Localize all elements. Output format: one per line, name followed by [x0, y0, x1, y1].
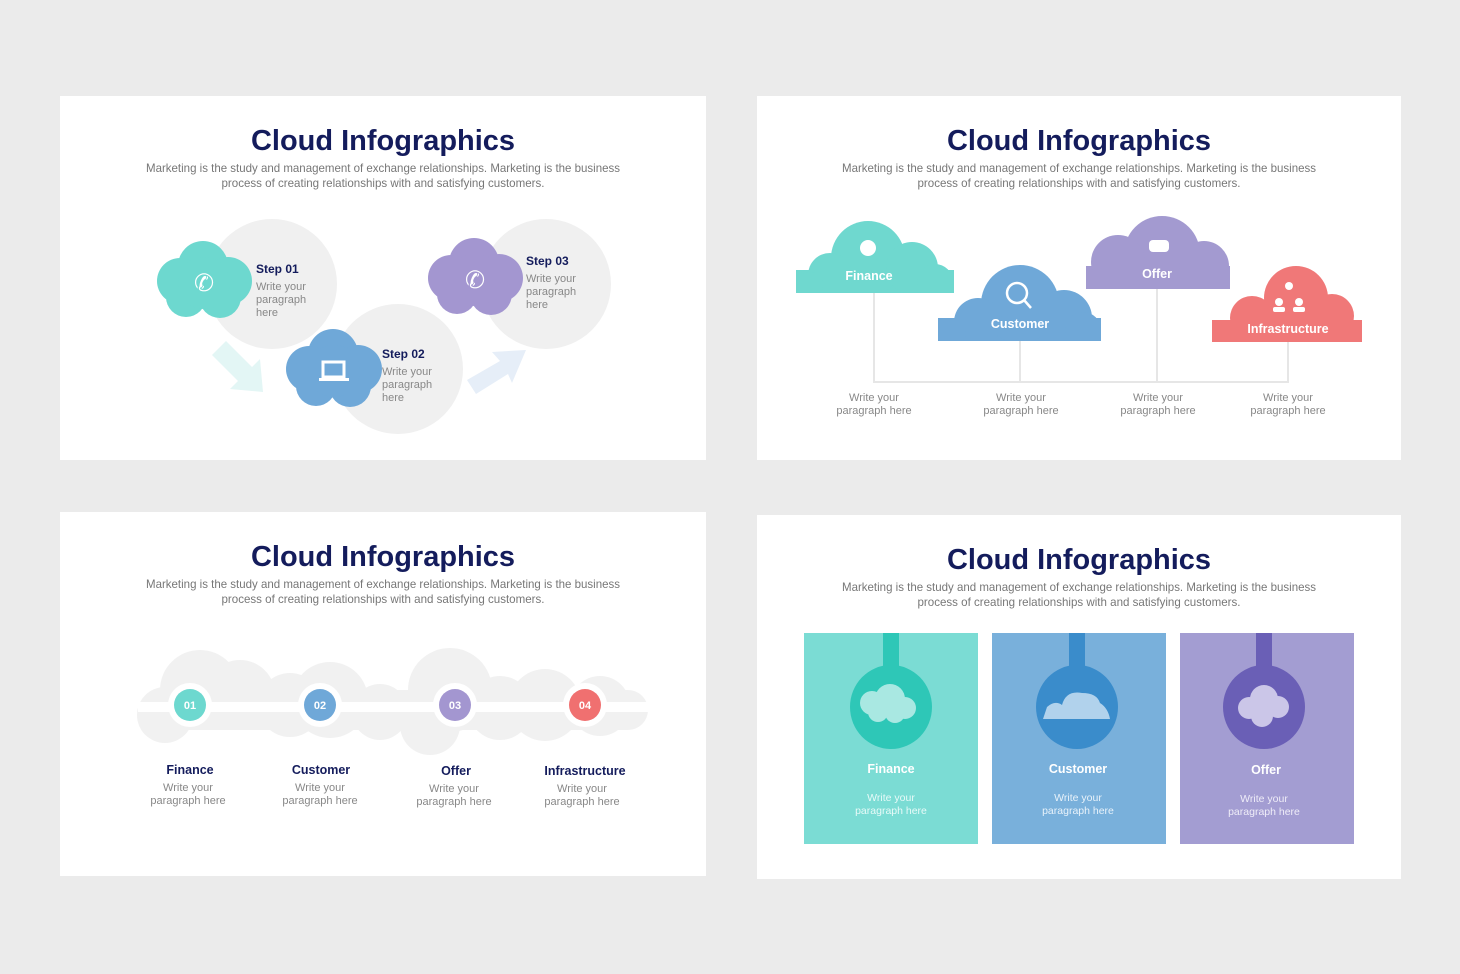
descriptions: Write your — [1263, 392, 1313, 404]
background circles — [207, 219, 611, 434]
labels: Infrastructure — [544, 764, 626, 778]
icon: phone transfer: ✆ — [465, 266, 485, 294]
text: step 02: here — [382, 392, 404, 404]
text: step 02: paragraph — [382, 379, 432, 391]
marker 02 — [298, 683, 342, 727]
text: step 01: Step 01 — [256, 262, 299, 276]
descriptions: paragraph here — [836, 405, 912, 417]
labels: paragraph here — [150, 795, 226, 807]
text: step 01 — [256, 262, 306, 319]
descriptions — [836, 392, 1326, 417]
cloud: customer — [938, 265, 1101, 348]
title: Cloud Infographics — [947, 125, 1211, 157]
label: customer: Customer — [991, 317, 1049, 331]
card: offer: Write your — [1240, 793, 1288, 805]
labels: Customer — [292, 763, 350, 777]
text: step 03: paragraph — [526, 286, 576, 298]
card: customer — [992, 633, 1166, 844]
subtitle — [146, 161, 620, 190]
card: customer: paragraph here — [1042, 805, 1114, 817]
labels: Finance — [166, 763, 214, 777]
text: step 02 — [382, 347, 432, 404]
panel: cloud hierarchy — [757, 96, 1401, 460]
descriptions: paragraph here — [1120, 405, 1196, 417]
subtitle: Marketing is the study and management of exchange relationships. Marketing is the business — [842, 161, 1316, 175]
text: step 03 — [526, 254, 576, 311]
card: customer: Customer — [1049, 762, 1107, 776]
card: offer: Offer — [1251, 763, 1281, 777]
labels: paragraph here — [544, 796, 620, 808]
title: Cloud Infographics — [251, 541, 515, 573]
labels — [150, 763, 626, 808]
descriptions: Write your — [1133, 392, 1183, 404]
card: finance: Write your — [867, 792, 915, 804]
card: customer: Write your — [1054, 792, 1102, 804]
subtitle: Marketing is the study and management of exchange relationships. Marketing is the business — [146, 161, 620, 175]
marker 03 — [433, 683, 477, 727]
card: finance — [804, 633, 978, 844]
cloud: step 01 — [157, 241, 252, 318]
panel: cards — [757, 515, 1401, 879]
card: finance: paragraph here — [855, 805, 927, 817]
subtitle: Marketing is the study and management of exchange relationships. Marketing is the business — [146, 577, 620, 591]
subtitle: process of creating relationships with and satisfying customers. — [918, 176, 1240, 190]
text: step 02: Step 02 — [382, 347, 425, 361]
title: Cloud Infographics — [947, 544, 1211, 576]
cloud: step 03 — [428, 238, 523, 315]
icon: phone: ✆ — [194, 269, 214, 297]
descriptions: Write your — [996, 392, 1046, 404]
text: step 01: paragraph — [256, 294, 306, 306]
icon: cloud — [1238, 685, 1289, 727]
labels: Write your — [295, 782, 345, 794]
marker 04 — [563, 683, 607, 727]
label: infrastructure: Infrastructure — [1247, 322, 1329, 336]
icon: offer hand — [1149, 240, 1169, 252]
subtitle: Marketing is the study and management of exchange relationships. Marketing is the business — [842, 580, 1316, 594]
label: offer: Offer — [1142, 267, 1172, 281]
cloud: offer — [1086, 216, 1230, 292]
text: step 03: Step 03 — [526, 254, 569, 268]
labels: Write your — [163, 782, 213, 794]
card: finance: Finance — [867, 762, 915, 776]
cloud: infrastructure — [1212, 266, 1362, 344]
subtitle — [842, 580, 1316, 609]
subtitle: process of creating relationships with and satisfying customers. — [222, 176, 544, 190]
icon: org chart — [1273, 282, 1305, 312]
panel: timeline — [60, 512, 706, 876]
arrow: down-right — [212, 341, 263, 392]
label: finance: Finance — [845, 269, 893, 283]
labels: Offer — [441, 764, 471, 778]
text: step 01: Write your — [256, 281, 306, 293]
panel: step process — [60, 96, 706, 460]
icon: finance hand — [860, 240, 876, 256]
text: step 01: here — [256, 307, 278, 319]
labels: paragraph here — [416, 796, 492, 808]
background clouds — [137, 648, 648, 755]
title: Cloud Infographics — [251, 125, 515, 157]
icon: cloud — [860, 684, 916, 723]
timeline line — [138, 702, 650, 712]
marker 01: 01 — [184, 700, 196, 712]
labels: paragraph here — [282, 795, 358, 807]
subtitle — [842, 161, 1316, 190]
text: step 02: Write your — [382, 366, 432, 378]
subtitle: process of creating relationships with and satisfying customers. — [222, 592, 544, 606]
descriptions: Write your — [849, 392, 899, 404]
marker 02: 02 — [314, 700, 326, 712]
cloud: finance — [796, 221, 954, 300]
cloud: step 02 — [286, 329, 382, 407]
labels: Write your — [429, 783, 479, 795]
arrow: up-right — [467, 350, 526, 394]
descriptions: paragraph here — [1250, 405, 1326, 417]
marker 03: 03 — [449, 700, 461, 712]
text: step 03: here — [526, 299, 548, 311]
card: offer — [1180, 633, 1354, 844]
subtitle: process of creating relationships with and satisfying customers. — [918, 595, 1240, 609]
connector lines — [874, 289, 1288, 382]
marker 04: 04 — [579, 700, 592, 712]
marker 01 — [168, 683, 212, 727]
icon: magnifier — [1007, 283, 1031, 308]
descriptions: paragraph here — [983, 405, 1059, 417]
icon: cloud — [1043, 692, 1110, 719]
text: step 03: Write your — [526, 273, 576, 285]
icon: laptop — [323, 362, 344, 377]
card: offer: paragraph here — [1228, 806, 1300, 818]
subtitle — [146, 577, 620, 606]
labels: Write your — [557, 783, 607, 795]
